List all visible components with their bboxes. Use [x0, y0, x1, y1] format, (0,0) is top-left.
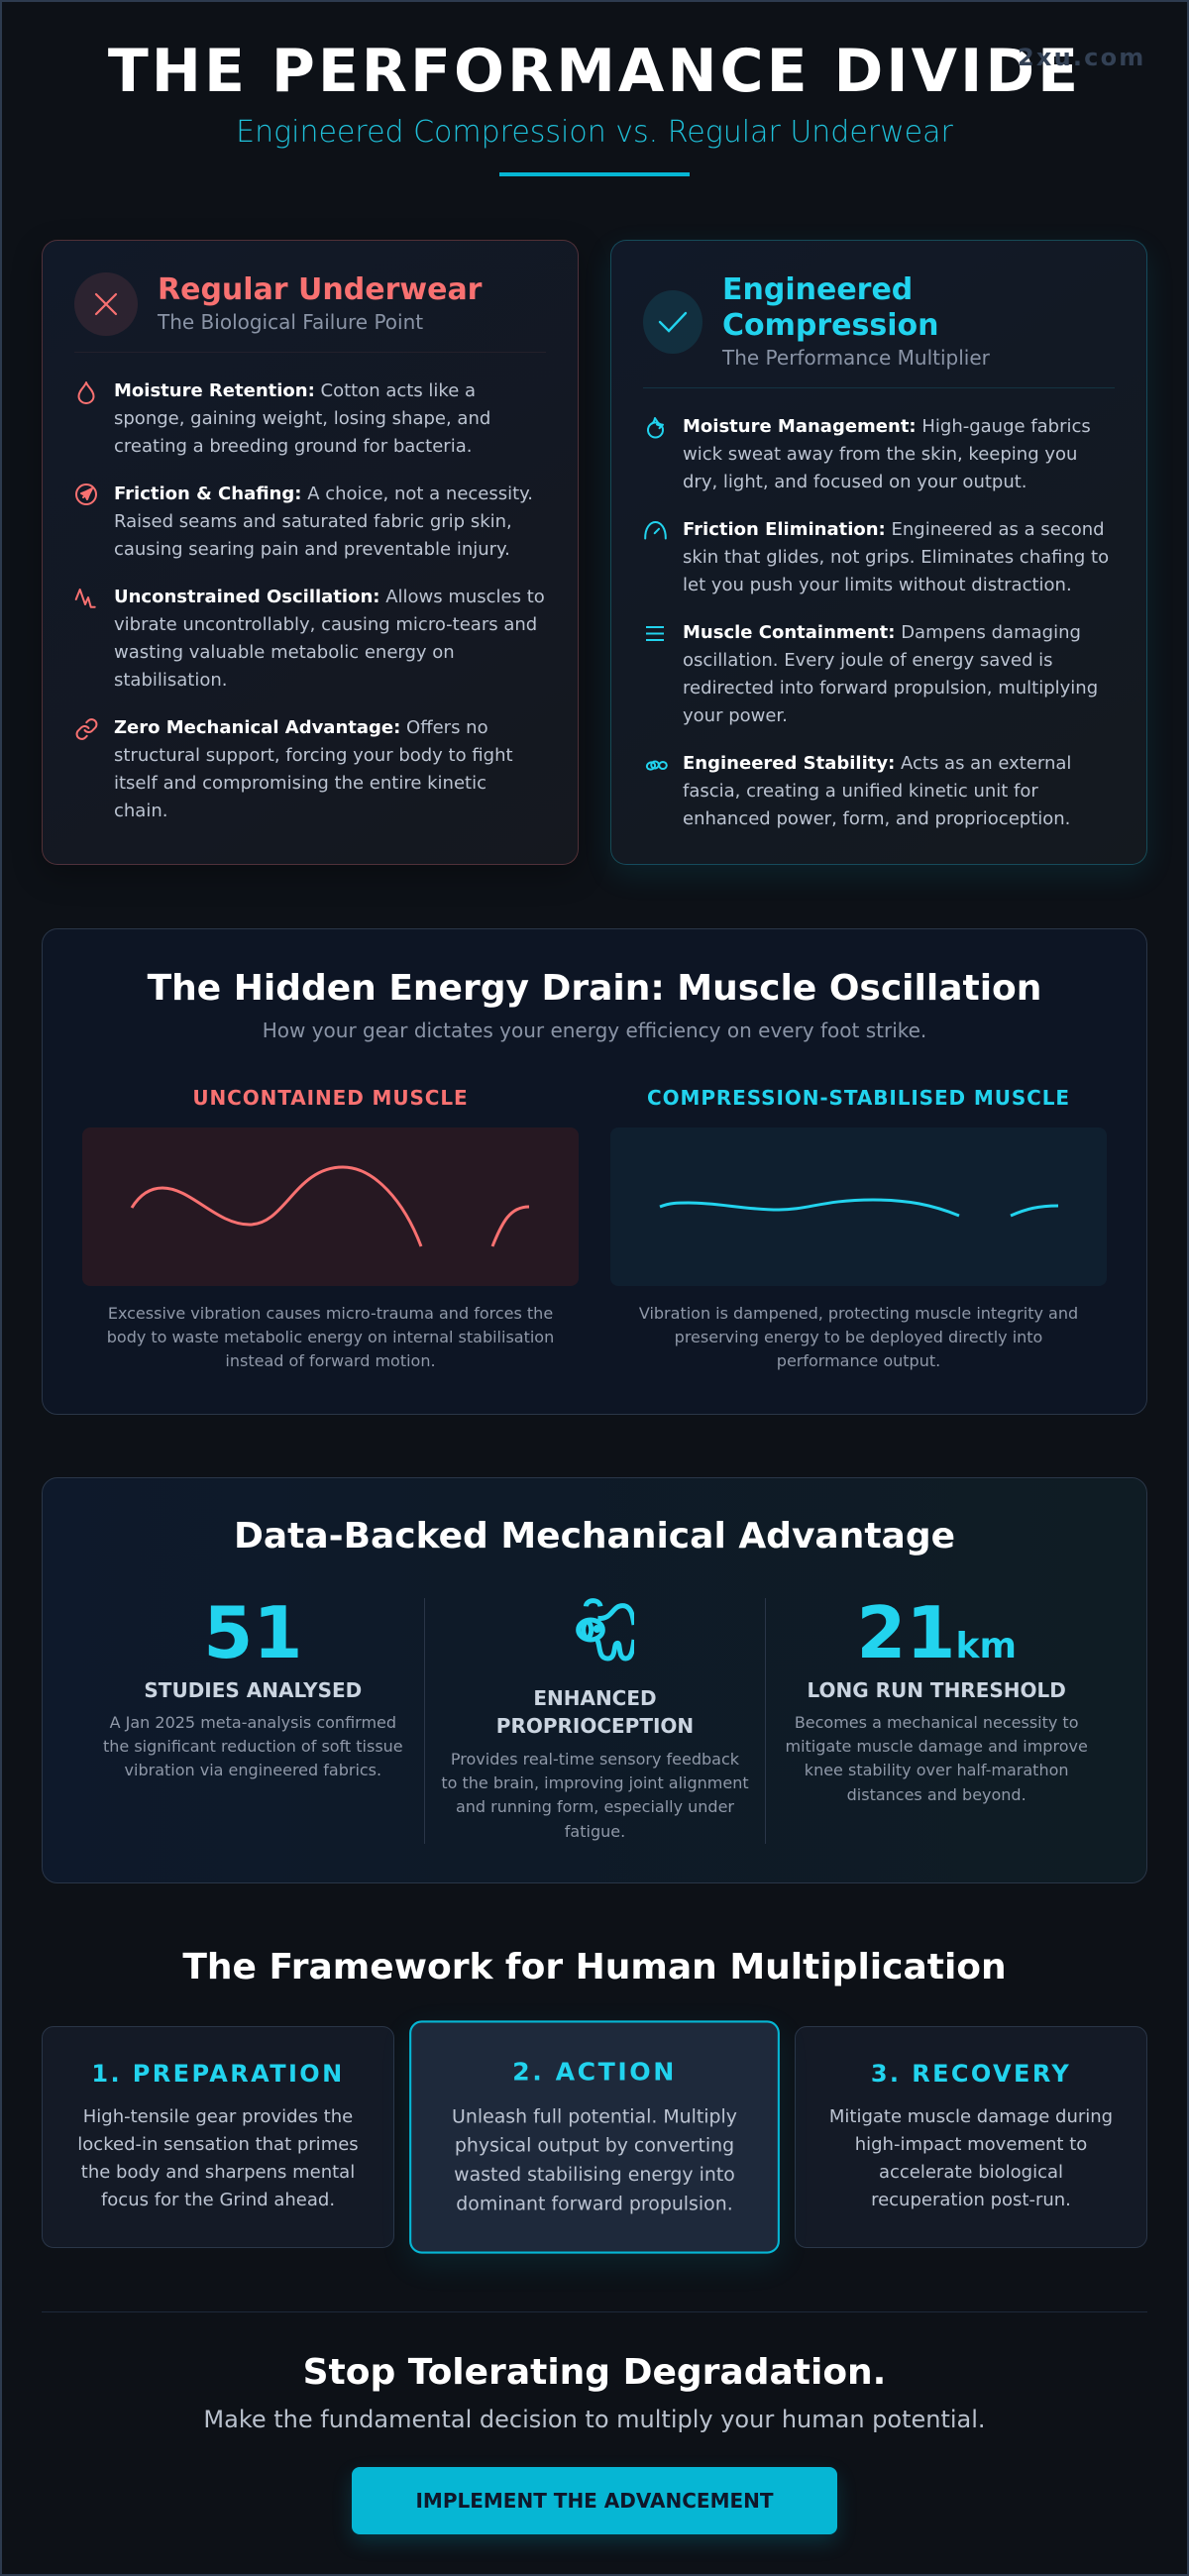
header accent rule: [499, 172, 690, 176]
label: proprioception: PROPRIOCEPTION: [496, 1714, 694, 1738]
card text: Unleash full potential. Multiply physical output by converting wasted stabilising energy into dominant forward propulsion.: [452, 2105, 737, 2215]
label: threshold: LONG RUN THRESHOLD: [807, 1678, 1066, 1702]
card: recovery: [795, 2026, 1147, 2248]
caption: uncontained: Excessive vibration causes micro-trauma and forces the body to waste metabolic energy on internal stabilisation instead of forward motion.: [107, 1304, 554, 1370]
item: zero mechanical advantage: Zero Mechanical Advantage: Offers no structural support, forcing your body to fight itself and compromising the entire kinetic chain.: [114, 717, 513, 821]
column: uncontained muscle: [82, 1086, 579, 1370]
chart: uncontained wave: [82, 1127, 579, 1286]
heading: engineered compression: The Performance Multiplier: [722, 346, 990, 370]
icon: check: [643, 290, 703, 354]
heading: engineered compression: Engineered Compression: [722, 272, 938, 343]
panel: engineered compression: [610, 240, 1147, 865]
heading: regular underwear: The Biological Failure Point: [158, 310, 423, 334]
item: moisture retention: Moisture Retention: Cotton acts like a sponge, gaining weight, losing shape, and creating a breeding ground for bacteria.: [114, 380, 490, 457]
number: 21km: 21km: [856, 1591, 1017, 1674]
card: preparation: [42, 2026, 394, 2248]
label: stabilised: COMPRESSION-STABILISED MUSCLE: [647, 1086, 1070, 1110]
card title: 1. PREPARATION: [91, 2060, 345, 2088]
label: uncontained: UNCONTAINED MUSCLE: [192, 1086, 469, 1110]
call to action text: Make the fundamental decision to multiply your human potential.: [203, 2406, 986, 2433]
number: 51: 51: [203, 1591, 302, 1674]
heading: regular underwear: [157, 272, 482, 334]
card title: 3. RECOVERY: [871, 2060, 1071, 2088]
stat: long run threshold: [765, 1598, 1107, 1844]
column: compression stabilised muscle: [610, 1086, 1107, 1370]
subtitle: Engineered Compression vs. Regular Underwear: [236, 115, 953, 149]
card: action: [409, 2020, 780, 2254]
stat: studies analysed: [103, 1591, 403, 1779]
heading: framework: The Framework for Human Multiplication: [182, 1946, 1007, 1987]
label: studies: STUDIES ANALYSED: [144, 1678, 362, 1702]
watermark: 2xu.com: [1018, 44, 1146, 71]
item: unconstrained oscillation: Unconstrained Oscillation: Allows muscles to vibrate uncontrollably, causing micro-tears and wasting valuable metabolic energy on stabilisation.: [114, 587, 545, 691]
text: threshold: Becomes a mechanical necessity to mitigate muscle damage and improve knee stability over half-marathon distances and beyond.: [785, 1713, 1088, 1804]
caption: stabilised: Vibration is dampened, protecting muscle integrity and preserving energy to be deployed directly into performance output.: [639, 1304, 1078, 1370]
button: [352, 2467, 837, 2534]
heading: mechanical advantage: Data-Backed Mechanical Advantage: [234, 1516, 955, 1556]
panel: data-backed advantage: [42, 1477, 1147, 1883]
item: muscle containment: Muscle Containment: Dampens damaging oscillation. Every joule of energy saved is redirected into forward propulsion, multiplying your power.: [683, 622, 1098, 726]
item: friction and chafing: Friction & Chafing: A choice, not a necessity. Raised seams and saturated fabric grip skin, causing searing pain and preventable injury.: [114, 483, 533, 560]
card text: High-tensile gear provides the locked-in sensation that primes the body and sharpens mental focus for the Grind ahead.: [77, 2106, 359, 2210]
subheading: How your gear dictates your energy efficiency on every foot strike.: [263, 1019, 926, 1042]
card title: 2. ACTION: [512, 2057, 677, 2087]
item: moisture management: Moisture Management: High-gauge fabrics wick sweat away from the skin, keeping you dry, light, and focused on your output.: [683, 416, 1091, 492]
heading: engineered compression: [721, 272, 990, 370]
text: studies: A Jan 2025 meta-analysis confirmed the significant reduction of soft tissue vibration via engineered fabrics.: [103, 1713, 403, 1779]
item: friction elimination: Friction Elimination: Engineered as a second skin that glides, not grips. Eliminates chafing to let you push your limits without distraction.: [683, 519, 1109, 595]
panel: regular underwear: [42, 240, 579, 865]
label: proprioception: [496, 1686, 694, 1738]
title: THE PERFORMANCE DIVIDE: [108, 37, 1081, 106]
card text: Mitigate muscle damage during high-impact movement to accelerate biological recuperation post-run.: [829, 2106, 1113, 2210]
item: engineered stability: Engineered Stability: Acts as an external fascia, creating a unified kinetic unit for enhanced power, form, and proprioception.: [683, 753, 1071, 829]
stat: proprioception: [424, 1598, 765, 1844]
icon: knot: [576, 1598, 634, 1661]
panel header: engineered compression: [643, 272, 1115, 388]
panel header: regular underwear: [74, 272, 546, 353]
icon: cross: [74, 272, 138, 336]
text: proprioception: Provides real-time sensory feedback to the brain, improving joint alignment and running form, especially under fatigue.: [441, 1750, 749, 1841]
heading: hidden energy drain: The Hidden Energy Drain: Muscle Oscillation: [148, 968, 1041, 1009]
button: IMPLEMENT THE ADVANCEMENT: [415, 2489, 774, 2513]
call to action heading: Stop Tolerating Degradation.: [303, 2352, 886, 2392]
label: proprioception: ENHANCED: [533, 1686, 657, 1710]
panel: muscle oscillation: [42, 928, 1147, 1415]
chart: stabilised wave: [610, 1127, 1107, 1286]
heading: regular underwear: Regular Underwear: [158, 272, 482, 307]
